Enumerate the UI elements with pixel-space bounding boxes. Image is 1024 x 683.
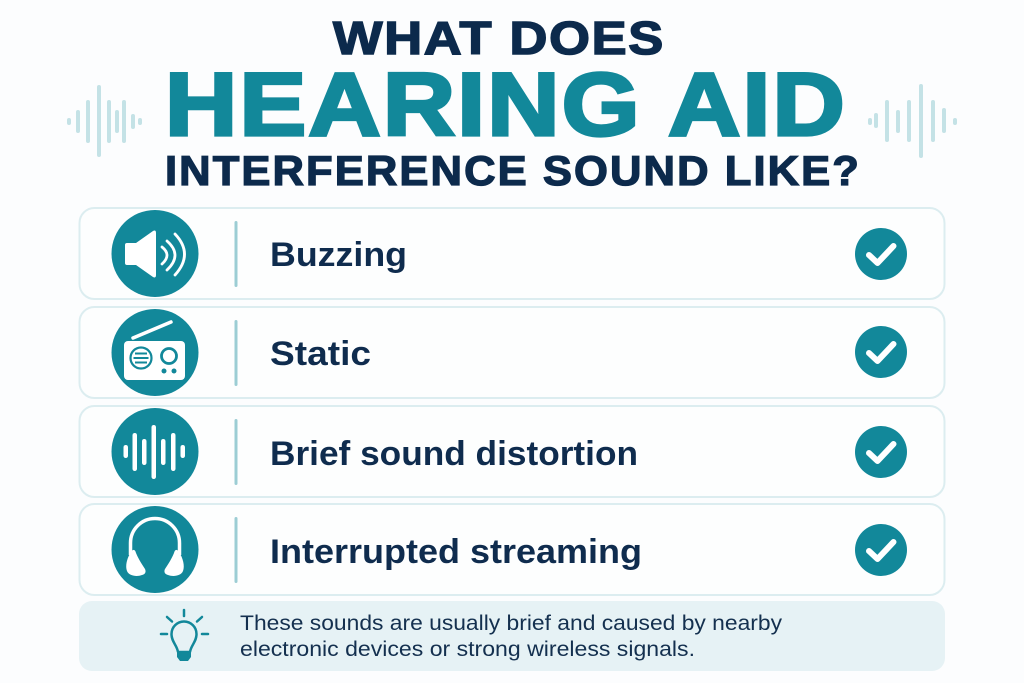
icon: headphones [112,506,198,593]
title [165,12,861,194]
icon: waveform [112,408,198,495]
label: brief sound distortion: Brief sound distortion [270,435,638,473]
icon: check [855,524,907,576]
icon: check [855,326,907,378]
icon: check [855,228,907,280]
divider [234,320,238,386]
panel: interrupted streaming row [80,504,944,595]
note text: electronic devices or strong wireless signals. [240,638,695,661]
panel: note [79,601,945,671]
icon: check [855,426,907,478]
icon: speaker [112,210,198,297]
panel: brief sound distortion row [80,406,944,497]
panel: static row [80,307,944,398]
panel: buzzing row [80,208,944,299]
title line: interference sound like: INTERFERENCE SOUND LIKE? [165,147,861,194]
divider [234,221,238,287]
divider [234,517,238,583]
label: buzzing: Buzzing [270,236,407,274]
title line: hearing aid: HEARING AID [165,54,847,154]
icon: light bulb [161,610,208,661]
label: interrupted streaming: Interrupted streaming [270,533,642,571]
title line: what does: WHAT DOES [333,12,665,64]
note text [240,612,783,661]
divider [234,419,238,485]
label: static: Static [270,335,371,373]
icon: radio [112,309,198,396]
icon: right sound wave [868,84,957,158]
icon: left sound wave [67,85,142,157]
note text: These sounds are usually brief and caused by nearby [240,612,783,635]
